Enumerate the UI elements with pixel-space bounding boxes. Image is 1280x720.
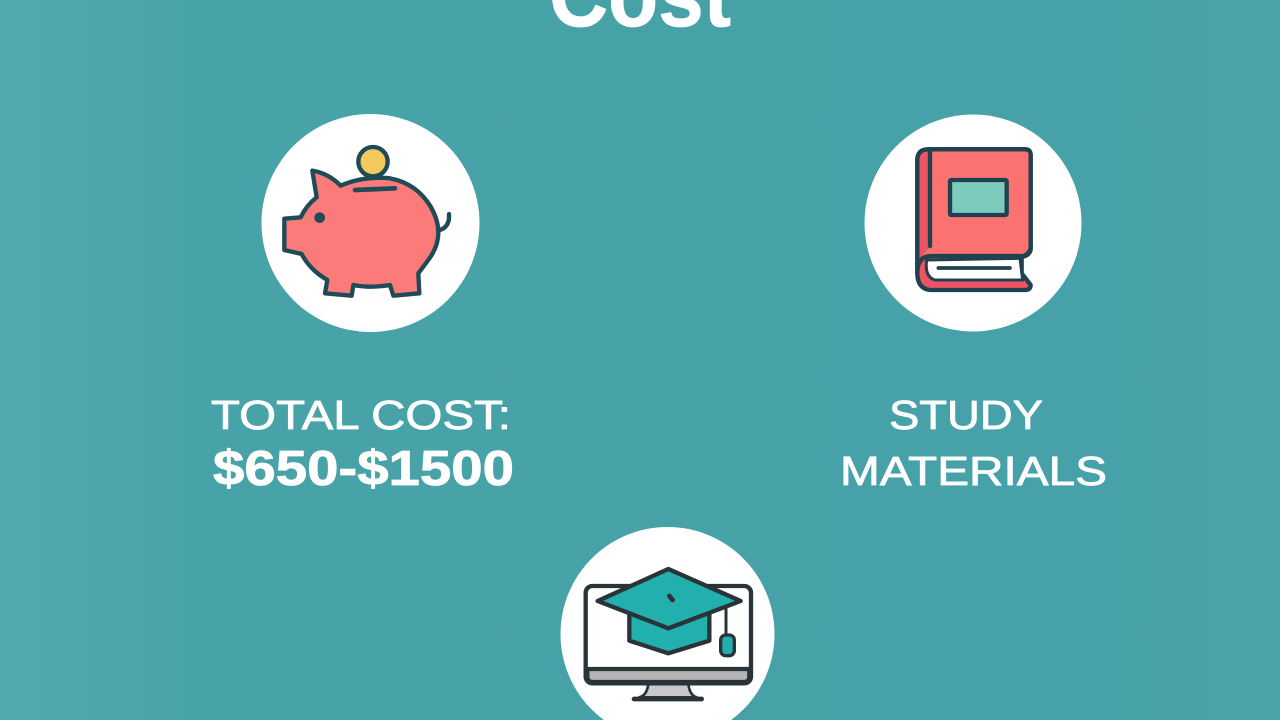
cover outline — [917, 149, 1031, 273]
stand base — [634, 692, 702, 706]
icon: book — [864, 114, 1082, 332]
tassel — [721, 635, 734, 656]
monitor stand — [639, 683, 697, 697]
cap base — [629, 613, 709, 653]
panel: online course — [560, 527, 774, 720]
book drawing — [917, 149, 1031, 290]
cap button — [669, 596, 673, 600]
monitor chin — [587, 669, 749, 682]
label: materials: MATERIALS — [840, 448, 1107, 494]
panel: study materials — [840, 114, 1107, 494]
icon: graduation cap on monitor — [586, 569, 751, 699]
coin slot — [355, 188, 395, 190]
piggy bank drawing — [284, 147, 449, 296]
value: cost range: $650-$1500 — [213, 442, 514, 496]
tassel cord — [721, 608, 730, 635]
spine line — [923, 152, 936, 246]
back cover — [917, 149, 1031, 290]
monitor body — [586, 586, 751, 683]
tail — [440, 214, 449, 230]
page lines — [938, 262, 1010, 273]
front cover — [922, 149, 1031, 257]
icon background circle — [262, 114, 480, 332]
icon background circle — [560, 527, 774, 720]
panel: total cost — [211, 114, 514, 496]
cap board — [598, 569, 741, 628]
pages — [926, 258, 1023, 280]
icon background circle — [864, 114, 1082, 332]
icon: piggy bank — [262, 114, 480, 332]
pig body — [284, 171, 438, 296]
coin — [358, 147, 388, 176]
label: total cost: TOTAL COST: — [211, 392, 511, 438]
label: study materials: STUDY — [889, 392, 1043, 438]
title plate — [950, 180, 1007, 215]
eye — [314, 212, 325, 223]
